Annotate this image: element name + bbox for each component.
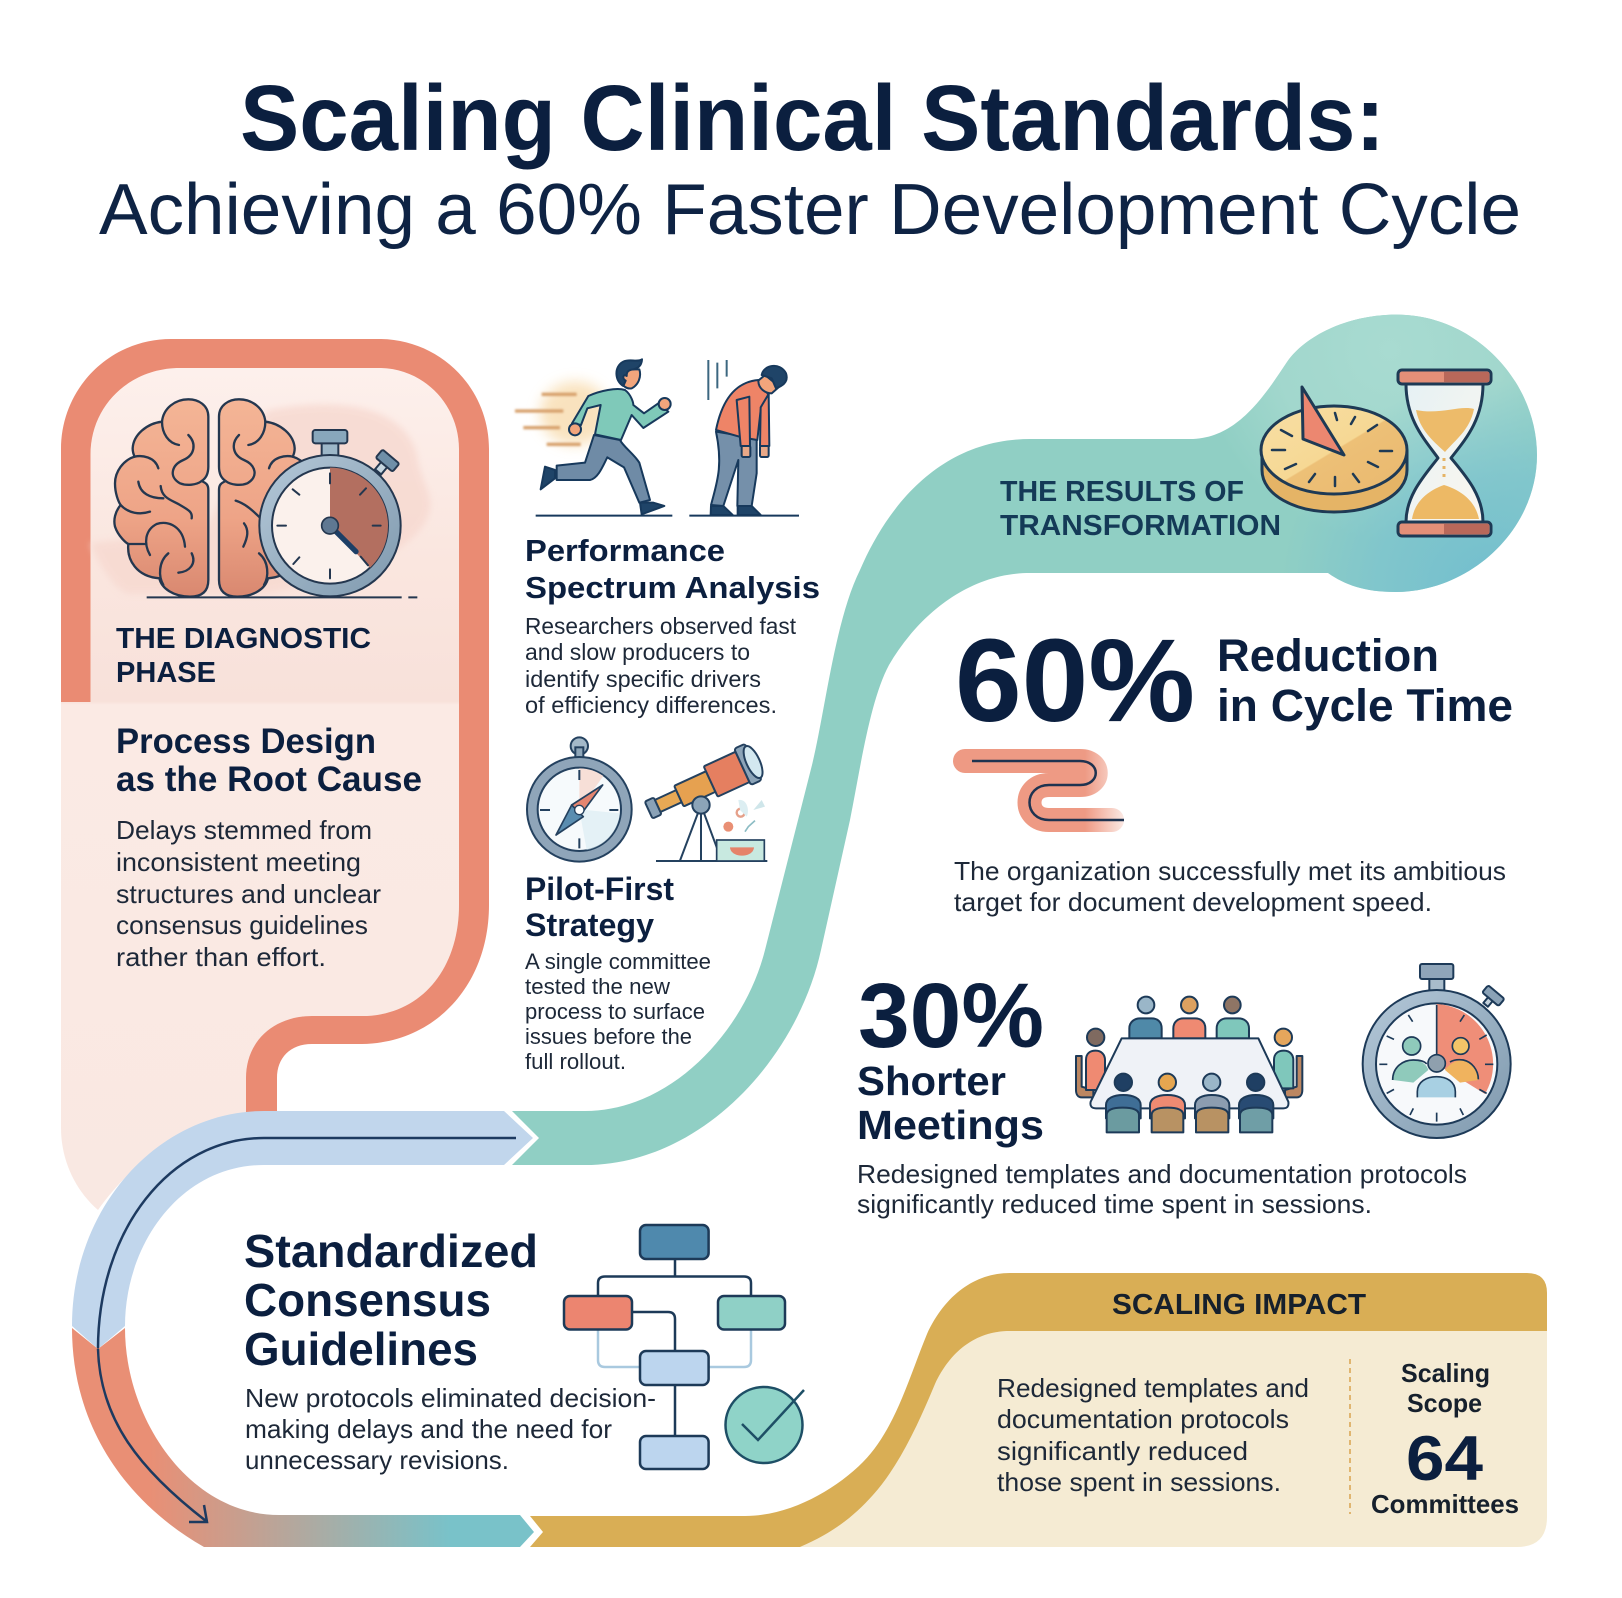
heading: standardized consensus guidelines: Consensus xyxy=(244,1274,491,1326)
icon: compass and telescope xyxy=(527,737,767,862)
gold ribbon and header xyxy=(530,1273,1547,1547)
stat label: reduction in cycle time xyxy=(1217,630,1513,731)
heading: pilot-first strategy xyxy=(525,871,674,943)
text block: 30% body xyxy=(857,1159,1467,1219)
text block: performance body: Researchers observed fast xyxy=(525,613,797,639)
arrow: curved line with head xyxy=(98,1349,207,1522)
text block: performance body: and slow producers to xyxy=(525,639,750,665)
text block: guidelines body: making delays and the need for xyxy=(245,1414,612,1444)
stat label: reduction in cycle time: in Cycle Time xyxy=(1217,680,1513,731)
panel: diagnostic phase xyxy=(61,339,489,1210)
text block: 60% body: target for document development speed. xyxy=(954,887,1432,917)
heading: the diagnostic phase: THE DIAGNOSTIC xyxy=(116,623,371,655)
cream panel xyxy=(800,1331,1547,1547)
heading: standardized consensus guidelines xyxy=(244,1225,538,1375)
heading: the diagnostic phase xyxy=(116,623,371,689)
arrow: blue ribbon centre line xyxy=(98,1138,516,1349)
text block: 30% body: significantly reduced time spent in sessions. xyxy=(857,1189,1372,1219)
panel: scaling impact xyxy=(530,1273,1547,1547)
text block: performance body: identify specific drivers xyxy=(525,666,761,692)
pink panel background xyxy=(61,368,459,1210)
heading: performance spectrum analysis xyxy=(525,533,820,605)
stat label: shorter meetings xyxy=(857,1058,1044,1148)
title xyxy=(99,66,1521,250)
stat: scaling scope 64 committees xyxy=(1371,1358,1519,1519)
text block: process design body xyxy=(116,815,381,972)
stat label: reduction in cycle time: Reduction xyxy=(1217,630,1439,681)
text block: scaling impact body: documentation protocols xyxy=(997,1404,1289,1434)
stat: scaling scope 64 committees: 64 xyxy=(1406,1424,1483,1494)
panel: pilot-first strategy xyxy=(525,737,767,1074)
text block: pilot body: full rollout. xyxy=(525,1049,626,1074)
text block: scaling impact body: those spent in sessions. xyxy=(997,1467,1281,1497)
text block: process design body: structures and unclear xyxy=(116,879,381,909)
text block: 60% body xyxy=(954,856,1506,917)
text block: scaling impact body xyxy=(997,1373,1309,1497)
stat: scaling scope 64 committees: Scope xyxy=(1407,1388,1482,1418)
text block: process design body: consensus guidelines xyxy=(116,910,368,940)
icon: hourglass xyxy=(1398,370,1491,536)
text block: performance body: of efficiency differences. xyxy=(525,692,777,718)
stat number: 30%: 30% xyxy=(858,965,1044,1067)
heading: standardized consensus guidelines: Guidelines xyxy=(244,1323,478,1375)
panel: results ribbon xyxy=(512,315,1537,1165)
text block: guidelines body xyxy=(245,1383,656,1475)
text block: pilot body xyxy=(525,949,711,1074)
panel: 30% stat xyxy=(857,964,1511,1219)
icon: shortened path squiggle xyxy=(965,761,1124,820)
icon: check badge xyxy=(726,1387,804,1463)
stat label: shorter meetings: Meetings xyxy=(857,1102,1044,1148)
text block: pilot body: issues before the xyxy=(525,1024,692,1049)
text block: pilot body: process to surface xyxy=(525,999,705,1024)
text block: pilot body: A single committee xyxy=(525,949,711,974)
panel: performance spectrum analysis xyxy=(515,359,820,718)
stat number: 60%: 60% xyxy=(955,615,1195,747)
heading: pilot-first strategy: Pilot-First xyxy=(525,871,674,907)
text block: pilot body: tested the new xyxy=(525,974,670,999)
heading: process design: as the Root Cause xyxy=(116,760,422,799)
text block: process design body: inconsistent meeting xyxy=(116,847,361,877)
icon: running and slouching figures xyxy=(515,359,799,516)
heading: the results of transformation: TRANSFORMATION xyxy=(1000,510,1281,542)
arrow: blue ribbon xyxy=(72,1111,533,1349)
title: Scaling Clinical Standards: xyxy=(240,66,1385,170)
heading: performance spectrum analysis: Spectrum Analysis xyxy=(525,570,820,605)
arrow: coral to teal ribbon xyxy=(72,1328,534,1547)
teal blob highlight xyxy=(1190,315,1537,592)
text block: scaling impact body: Redesigned templates and xyxy=(997,1373,1309,1403)
icon: brain and stopwatch xyxy=(90,399,431,597)
icon: clock disc xyxy=(1261,387,1407,512)
icon: stopwatch with people xyxy=(1363,964,1511,1138)
heading: process design xyxy=(116,722,422,799)
icon: flowchart xyxy=(564,1225,785,1469)
stat: scaling scope 64 committees: Scaling xyxy=(1401,1358,1490,1388)
text block: guidelines body: unnecessary revisions. xyxy=(245,1445,509,1475)
heading: the results of transformation: THE RESULTS OF xyxy=(1000,476,1244,508)
text block: 30% body: Redesigned templates and documentation protocols xyxy=(857,1159,1467,1189)
text block: scaling impact body: significantly reduced xyxy=(997,1436,1248,1466)
heading: pilot-first strategy: Strategy xyxy=(525,907,654,943)
title: Achieving a 60% Faster Development Cycle xyxy=(99,170,1521,250)
text block: process design body: rather than effort. xyxy=(116,942,326,972)
heading: scaling impact: SCALING IMPACT xyxy=(1112,1289,1366,1321)
panel: standardized consensus guidelines xyxy=(72,1111,804,1547)
coral frame xyxy=(61,339,489,1113)
text block: guidelines body: New protocols eliminated decision- xyxy=(245,1383,656,1413)
icon: meeting table xyxy=(1076,997,1302,1132)
heading: the diagnostic phase: PHASE xyxy=(116,657,216,689)
heading: standardized consensus guidelines: Standardized xyxy=(244,1225,538,1277)
heading: performance spectrum analysis: Performance xyxy=(525,533,725,568)
stat: scaling scope 64 committees: Committees xyxy=(1371,1489,1519,1519)
text block: performance body xyxy=(525,613,797,718)
heading: the results of transformation xyxy=(1000,476,1281,542)
teal blob shade xyxy=(1190,315,1537,592)
panel: 60% stat xyxy=(954,615,1513,917)
text block: process design body: Delays stemmed from xyxy=(116,815,372,845)
teal ribbon xyxy=(512,315,1537,1165)
stat label: shorter meetings: Shorter xyxy=(857,1058,1006,1104)
heading: process design: Process Design xyxy=(116,722,376,761)
text block: 60% body: The organization successfully met its ambitious xyxy=(954,856,1506,886)
